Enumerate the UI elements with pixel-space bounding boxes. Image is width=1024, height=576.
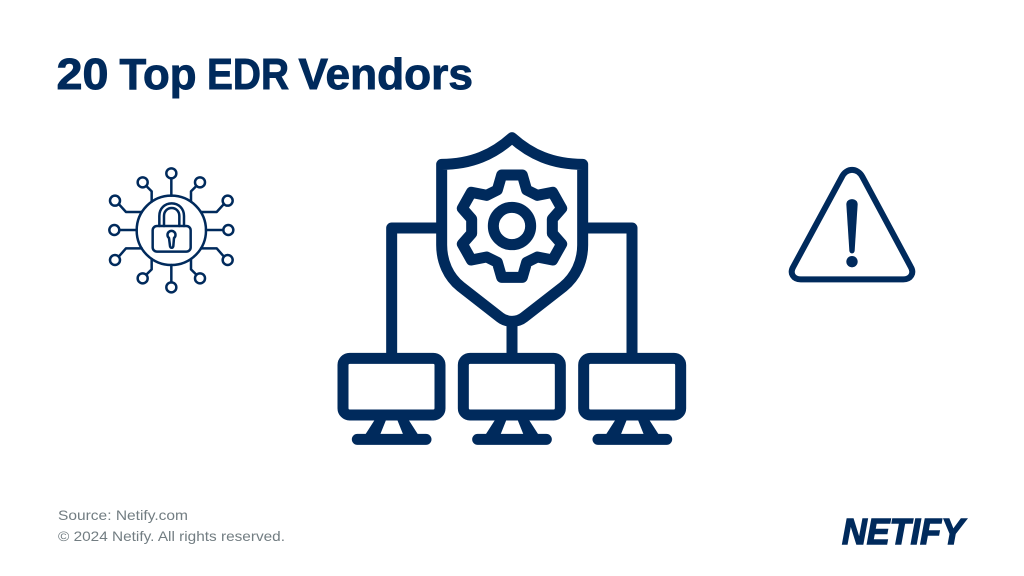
monitor right	[584, 358, 681, 439]
gear hub	[493, 207, 531, 245]
monitor centre	[463, 358, 560, 439]
title	[56, 50, 473, 99]
shield	[442, 138, 583, 321]
title: Vendors	[298, 50, 473, 99]
title: 20	[56, 50, 108, 99]
title: Top	[120, 50, 196, 99]
icon: network padlock	[109, 168, 233, 292]
logo: NETIFY: NETIFY	[842, 511, 967, 552]
icon: shield with gear and three networked monitors	[343, 138, 681, 439]
copyright text: © 2024 Netify. All rights reserved.	[58, 528, 285, 544]
connector lines	[392, 228, 632, 353]
monitor left	[343, 358, 440, 439]
icon: warning triangle	[792, 170, 912, 279]
source text: Source: Netify.com	[58, 507, 188, 523]
title: EDR	[207, 50, 289, 99]
gear	[462, 175, 562, 277]
